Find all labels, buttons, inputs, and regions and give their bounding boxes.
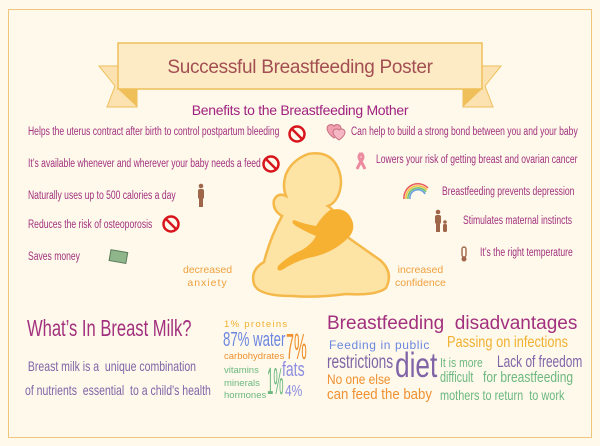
benefit: available: It’s available whenever and wherever your baby needs a feed: [28, 158, 261, 170]
word cloud: disadvantages: can feed the baby: [327, 386, 432, 403]
text: milk description: [25, 358, 211, 398]
benefit: cancer: Lowers your risk of getting breast and ovarian cancer: [376, 154, 577, 166]
word cloud: milk composition: 87% water: [223, 329, 285, 351]
icons: [108, 124, 467, 264]
icon: woman: [198, 184, 204, 207]
heading: what's in breast milk: What’s In Breast Milk?: [27, 315, 191, 341]
word cloud: disadvantages: Lack of freedom: [497, 352, 582, 371]
right benefits: [351, 126, 578, 259]
word cloud: milk composition: 1% proteins: [224, 319, 288, 330]
word cloud: disadvantages: It is more: [440, 355, 483, 370]
word cloud: milk composition: hormones: [224, 390, 266, 401]
icon: rainbow: [404, 184, 428, 199]
word cloud: milk composition: fats: [282, 359, 305, 381]
increased confidence label: [395, 264, 446, 289]
left benefits: [28, 126, 279, 263]
title ribbon: [98, 42, 502, 108]
word cloud: milk composition: 1%: [267, 361, 283, 403]
word cloud: milk composition: [223, 319, 307, 403]
word cloud: disadvantages: difficult: [440, 369, 473, 386]
benefit: money: Saves money: [28, 251, 80, 263]
word cloud: disadvantages: No one else: [327, 371, 391, 387]
text: milk description: of nutrients essential to a child's health: [25, 382, 211, 398]
increased confidence label: confidence: [395, 277, 446, 289]
increased confidence label: increased: [398, 264, 443, 276]
icon: mother child: [435, 210, 447, 232]
icon: no bottle 1: [290, 126, 304, 142]
word cloud: milk composition: 7%: [286, 326, 307, 367]
word cloud: disadvantages: Feeding in public: [329, 338, 430, 352]
benefit: depression: Breastfeeding prevents depression: [442, 186, 574, 198]
word cloud: milk composition: minerals: [224, 378, 260, 388]
word cloud: disadvantages: [327, 313, 582, 403]
word cloud: milk composition: carbohydrates: [224, 351, 284, 362]
decreased anxiety label: [183, 264, 232, 289]
subtitle: Benefits to the Breastfeeding Mother: [192, 102, 408, 118]
icon: hearts: [327, 125, 345, 140]
word cloud: disadvantages: Passing on infections: [447, 334, 568, 351]
benefit: osteoporosis: Reduces the risk of osteoporosis: [28, 219, 152, 231]
word cloud: disadvantages: for breastfeeding: [483, 369, 573, 386]
benefit: temperature: It’s the right temperature: [480, 247, 573, 259]
title ribbon: Successful Breastfeeding Poster: [167, 57, 434, 78]
benefit: calories: Naturally uses up to 500 calories a day: [28, 190, 176, 202]
benefit: uterus: Helps the uterus contract after birth to control postpartum bleeding: [28, 126, 279, 138]
illustration: mother and baby: [252, 152, 390, 298]
word cloud: disadvantages: diet: [395, 346, 437, 385]
word cloud: disadvantages: restrictions: [327, 352, 393, 373]
text: milk description: Breast milk is a unique combination: [28, 358, 196, 374]
word cloud: milk composition: 4%: [285, 383, 302, 400]
decreased anxiety label: anxiety: [187, 277, 228, 289]
word cloud: milk composition: vitamins: [224, 365, 259, 376]
icon: money: [109, 250, 128, 263]
word cloud: disadvantages: mothers to return to work: [440, 387, 564, 403]
icon: no sign 3: [164, 216, 178, 232]
benefit: instincts: Stimulates maternal instincts: [463, 215, 572, 227]
decreased anxiety label: decreased: [183, 264, 232, 276]
icon: no bottle 2: [264, 156, 278, 172]
word cloud: disadvantages: Breastfeeding disadvantages: [327, 313, 577, 334]
icon: pink ribbon: [357, 153, 365, 169]
benefit: bond: Can help to build a strong bond between you and your baby: [351, 126, 578, 138]
icon: thermometer: [462, 247, 466, 262]
